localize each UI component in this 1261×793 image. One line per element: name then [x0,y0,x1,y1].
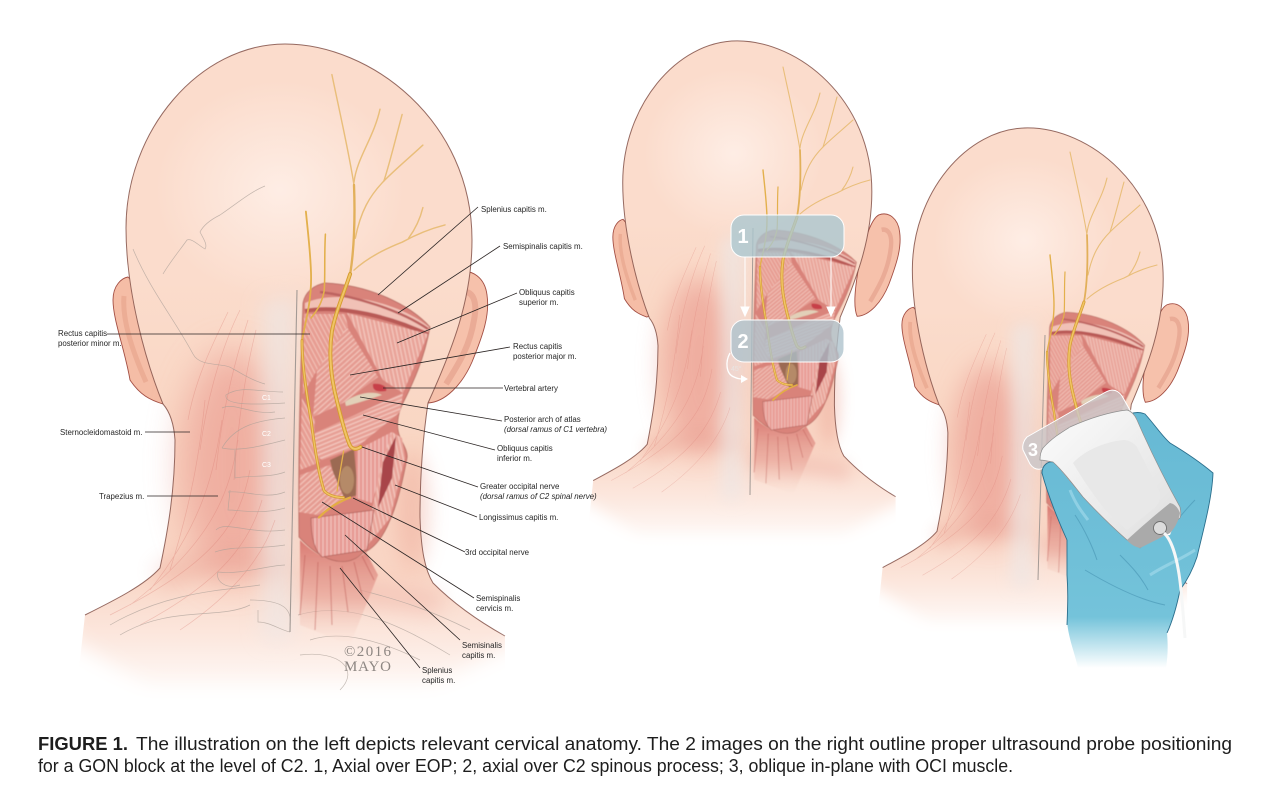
labels: anatomy [58,205,607,685]
copyright mark: ©2016 [344,644,392,660]
skeleton overlay [110,186,470,690]
rotation arrow 45 degrees [727,353,748,383]
labels: anatomy: Semispinalis [476,594,520,603]
caption: The illustration on the left depicts relevant cervical anatomy. The 2 images on the right outline proper ultrasound probe positioning [136,733,1232,754]
copyright mark [344,644,392,675]
midline [750,228,753,495]
labels: anatomy: Rectus capitis [513,342,562,351]
labels: anatomy: (dorsal ramus of C1 vertebra) [504,425,607,434]
icon: ultrasound probe [1040,410,1185,638]
spinal level labels: C3 [262,462,271,469]
labels: anatomy: Semisinalis [462,641,502,650]
panel: anatomy illustration [58,44,607,705]
spinal level labels: C1 [262,395,271,402]
labels: anatomy: posterior major m. [513,352,577,361]
labels: anatomy: cervicis m. [476,604,513,613]
labels: anatomy: Splenius [422,666,452,675]
caption [38,733,1232,776]
probe position 1 [731,215,844,257]
labels: anatomy: capitis m. [422,676,455,685]
labels: anatomy: Sternocleidomastoid m. [60,428,142,437]
icon: gloved hand [1042,412,1213,668]
probe position 3 [1023,390,1132,469]
icon: left figure head and neck [75,44,505,705]
icon: middle figure head and neck [586,41,900,550]
muscle window with nerves [1046,152,1157,584]
icon: right figure head and neck [875,128,1189,637]
muscle window with nerves [753,67,870,494]
labels: anatomy: superior m. [519,298,558,307]
copyright mark: MAYO [344,659,391,675]
labels: anatomy: Splenius capitis m. [481,205,547,214]
labels: anatomy: posterior minor m. [58,339,122,348]
midline [1038,335,1045,580]
panel: probe position 3 with hand [875,128,1213,668]
labels: anatomy: capitis m. [462,651,495,660]
labels: anatomy: 3rd occipital nerve [465,548,530,557]
labels: anatomy: inferior m. [497,454,532,463]
rotation arrow 45 degrees: 45° [731,365,742,373]
labels: anatomy: Vertebral artery [504,384,558,393]
leader lines [107,207,517,668]
labels: anatomy: Semispinalis capitis m. [503,242,583,251]
muscle dissection window with nerves [299,75,445,645]
probe position 2: 2 [737,331,749,353]
probe position 3: 3 [1028,440,1038,460]
probe position 2 [731,320,844,362]
transfer arrows between positions [741,257,835,316]
spinal level labels: C2 [262,431,271,438]
caption: FIGURE 1. [38,733,128,754]
spinal level labels [262,395,271,469]
labels: anatomy: Obliquus capitis [497,444,553,453]
midline [290,290,297,632]
labels: anatomy: Greater occipital nerve [480,482,560,491]
labels: anatomy: Longissimus capitis m. [479,513,558,522]
labels: anatomy: Obliquus capitis [519,288,575,297]
probe position 1: 1 [737,226,749,248]
labels: anatomy: Rectus capitis [58,329,107,338]
labels: anatomy: (dorsal ramus of C2 spinal nerve) [480,492,597,501]
labels: anatomy: Posterior arch of atlas [504,415,581,424]
icon: probe cable [1164,533,1185,638]
labels: anatomy: Trapezius m. [99,492,144,501]
panel: probe positions 1 and 2 [586,41,900,550]
caption: for a GON block at the level of C2. 1, Axial over EOP; 2, axial over C2 spinous process; 3, oblique in-plane with OCI muscle. [38,755,1013,776]
